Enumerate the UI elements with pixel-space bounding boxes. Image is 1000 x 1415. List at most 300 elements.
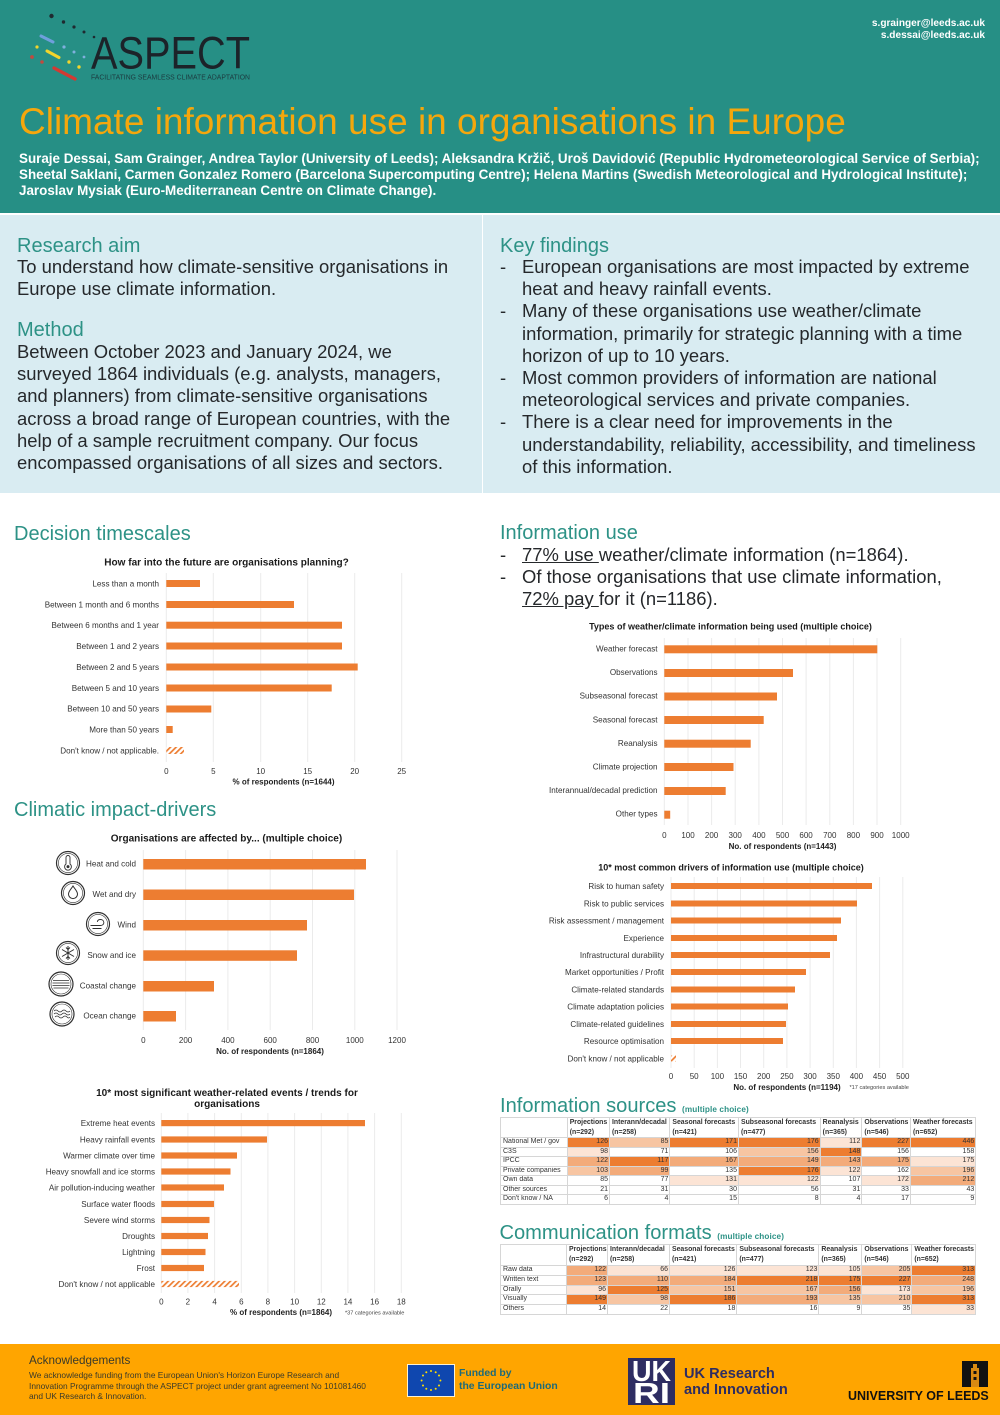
table: information sources: Own data [503, 1176, 533, 1183]
table: information sources: 33 [901, 1186, 909, 1193]
table: communication formats: Reanalysis [821, 1246, 857, 1253]
heading: information use: Information use [500, 522, 638, 544]
panel: research aim and method [0, 215, 482, 493]
category labels: Climate adaptation policies [567, 1002, 664, 1012]
axis: 350 [827, 1072, 841, 1081]
axis: 300 [803, 1072, 817, 1081]
category labels: Observations [610, 668, 658, 677]
text: information use list: - [500, 566, 506, 587]
axis: % of respondents (n=1864) [230, 1308, 332, 1317]
table: communication formats: Raw data [503, 1266, 533, 1273]
text: key findings list: information, primarily for strategic planning with a time [522, 323, 962, 344]
axis: 250 [780, 1072, 794, 1081]
table: information sources: 85 [661, 1138, 668, 1145]
table: information sources: (n=477) [741, 1128, 765, 1136]
acknowledgements text: Innovation Programme through the ASPECT project under grant agreement No 101081460 [29, 1381, 366, 1391]
text: information use list [500, 544, 942, 609]
table: information sources: 158 [963, 1148, 974, 1155]
table: information sources: 149 [807, 1157, 819, 1164]
table: information sources: 6 [604, 1195, 608, 1202]
axis: 1000 [892, 831, 910, 840]
category labels: Between 2 and 5 years [76, 663, 159, 672]
chart: climatic impact drivers [49, 834, 406, 1056]
axis: 200 [757, 1072, 771, 1081]
text: key findings list: Many of these organisations use weather/climate [522, 300, 921, 321]
table: information sources: 21 [600, 1186, 608, 1193]
chart: planning horizon [45, 558, 407, 786]
table: information sources: 156 [897, 1148, 909, 1155]
table: communication formats: 313 [962, 1295, 974, 1302]
category labels: Don't know / not applicable. [60, 746, 159, 755]
category labels: Don't know / not applicable [568, 1054, 664, 1064]
table: information sources: 77 [661, 1176, 668, 1183]
category labels: Weather forecast [596, 644, 658, 653]
category labels: Other types [616, 810, 658, 819]
table: information sources [500, 1117, 976, 1205]
category labels: Infrastructural durability [580, 951, 665, 960]
category labels: Lightning [122, 1248, 155, 1257]
axis: 600 [264, 1036, 277, 1045]
bars [671, 883, 872, 1062]
heading: key findings: Key findings [500, 235, 609, 257]
category labels: Between 6 months and 1 year [51, 621, 159, 630]
category labels: Don't know / not applicable [59, 1280, 155, 1289]
table: communication formats: 110 [657, 1276, 668, 1283]
category labels [549, 644, 658, 819]
table: information sources: 56 [811, 1186, 819, 1193]
table: information sources: 196 [963, 1167, 974, 1174]
table: communication formats: 135 [849, 1295, 860, 1302]
table: information sources: 156 [807, 1148, 819, 1155]
text: research aim [17, 256, 448, 299]
table: information sources: 4 [856, 1195, 860, 1202]
axis [141, 1036, 406, 1056]
table: information sources: 175 [897, 1157, 909, 1164]
table: information sources: 143 [849, 1157, 860, 1164]
axis: 10 [256, 767, 266, 776]
heading: communication formats: Communication formats (multiple choice) [500, 1222, 784, 1244]
table: information sources: 106 [725, 1148, 737, 1155]
logo: European Union flag [407, 1364, 455, 1397]
table: communication formats: (n=365) [821, 1256, 846, 1262]
table: information sources: 171 [725, 1138, 737, 1145]
table: communication formats: 123 [806, 1266, 817, 1273]
table: communication formats: Others [503, 1305, 524, 1312]
text: funded by the European Union [459, 1368, 558, 1392]
table: communication formats: 22 [660, 1305, 668, 1312]
table: information sources: 148 [849, 1148, 860, 1155]
category labels: Subseasonal forecast [580, 692, 658, 700]
category labels: Market opportunities / Profit [565, 968, 665, 977]
category labels [46, 1119, 156, 1289]
category labels: More than 50 years [89, 725, 159, 734]
table: communication formats: 151 [724, 1286, 735, 1293]
logo: ASPECT [30, 14, 250, 82]
table: information sources: (n=258) [612, 1128, 636, 1136]
table: communication formats: 313 [962, 1266, 974, 1273]
text: key findings list: European organisations are most impacted by extreme [522, 256, 969, 277]
table: communication formats: 167 [806, 1286, 817, 1293]
category labels: Experience [624, 934, 664, 943]
table: information sources: Observations [864, 1119, 908, 1126]
axis: 100 [681, 831, 695, 840]
category labels: Surface water floods [81, 1200, 155, 1209]
table: information sources: 99 [661, 1167, 668, 1174]
table: information sources: 212 [963, 1176, 974, 1183]
category labels: Droughts [122, 1232, 155, 1241]
axis: 18 [397, 1298, 406, 1306]
axis: 500 [896, 1072, 910, 1081]
table: communication formats: Weather forecasts [914, 1246, 974, 1253]
axis [669, 1072, 910, 1092]
axis: 0 [669, 1072, 674, 1081]
table: communication formats: Written text [503, 1276, 538, 1283]
category labels: Wet and dry [92, 890, 137, 899]
axis: 14 [343, 1298, 353, 1306]
text: method: across a broad range of European countries, with the [17, 408, 450, 429]
chart title: 10* most significant weather-related events / trends for [96, 1088, 358, 1099]
table: communication formats: (n=477) [739, 1256, 764, 1262]
chart title: Organisations are affected by... (multiple choice) [111, 834, 342, 844]
category labels: Risk to human safety [588, 882, 665, 891]
table: information sources: 107 [849, 1176, 860, 1183]
table: communication formats: 123 [594, 1276, 606, 1283]
chart title: Types of weather/climate information being used (multiple choice) [589, 621, 872, 631]
category labels: Air pollution-inducing weather [49, 1183, 155, 1192]
axis: 450 [873, 1072, 887, 1081]
table: communication formats: 205 [899, 1266, 910, 1273]
table: information sources: Interann/decadal [612, 1119, 667, 1126]
category labels: Warmer climate over time [63, 1151, 155, 1160]
category labels: Ocean change [83, 1012, 136, 1021]
contact emails: s.dessai@leeds.ac.uk [881, 30, 985, 40]
category labels: Coastal change [80, 982, 136, 990]
axis: 5 [211, 767, 216, 776]
axis: 0 [662, 831, 667, 840]
table: communication formats: 227 [899, 1276, 910, 1283]
table: communication formats: 98 [660, 1295, 668, 1302]
category labels: Heavy rainfall events [80, 1135, 155, 1144]
table: communication formats: Subseasonal forecasts [739, 1246, 814, 1253]
axis: 200 [705, 831, 719, 840]
axis: 400 [752, 831, 766, 840]
category labels: Between 5 and 10 years [72, 684, 159, 693]
contact emails: s.grainger@leeds.ac.uk [872, 18, 985, 28]
table: communication formats: 105 [849, 1266, 860, 1273]
axis: 20 [350, 767, 360, 776]
authors: Sheetal Saklani, Carmen Gonzalez Romero (Barcelona Supercomputing Centre); Helena Martins (Swedish Meteorological and Hydrological Institute); [19, 167, 967, 182]
table: information sources: 122 [596, 1157, 608, 1164]
axis [164, 767, 407, 786]
table: information sources: Seasonal forecasts [672, 1119, 735, 1126]
table: information sources: Private companies [503, 1167, 561, 1174]
axis: 500 [776, 831, 790, 840]
table: information sources: (n=652) [913, 1128, 937, 1136]
text: UK Research and Innovation: UK Research [684, 1366, 775, 1382]
axis: 15 [303, 767, 313, 776]
icon: snowflake [56, 942, 80, 964]
table: information sources: 176 [807, 1167, 819, 1174]
axis [662, 831, 910, 851]
table: information sources: Projections [570, 1119, 607, 1126]
table: information sources: 103 [596, 1167, 608, 1174]
axis: 700 [823, 831, 837, 840]
category labels: Extreme heat events [81, 1119, 155, 1128]
table: information sources: (n=292) [570, 1128, 594, 1136]
table: information sources: 30 [729, 1186, 737, 1193]
table: information sources: 31 [661, 1186, 668, 1193]
heading: climatic impact-drivers: Climatic impact-drivers [14, 799, 216, 821]
category labels: Interannual/decadal prediction [549, 786, 658, 795]
category labels: Climate-related guidelines [570, 1020, 664, 1029]
axis: No. of respondents (n=1864) [216, 1047, 324, 1056]
table: communication formats: Seasonal forecasts [672, 1246, 735, 1253]
acknowledgements text [29, 1370, 366, 1401]
heading: information sources: Information sources (multiple choice) [500, 1095, 749, 1117]
table: information sources: 8 [815, 1195, 819, 1202]
table: communication formats: 186 [724, 1295, 735, 1302]
axis: 0 [164, 767, 169, 776]
category labels [45, 579, 159, 755]
table: communication formats: 35 [903, 1305, 910, 1312]
text: key findings list: heat and heavy rainfall events. [522, 278, 772, 299]
axis: 900 [870, 831, 884, 840]
axis: 8 [266, 1298, 271, 1306]
table: communication formats: 173 [899, 1286, 910, 1293]
table: information sources: 446 [963, 1138, 974, 1145]
table: information sources: 126 [596, 1138, 608, 1145]
table: information sources: Reanalysis [823, 1119, 859, 1126]
table: communication formats: 196 [962, 1286, 974, 1293]
text: method: and planners) from climate-sensitive organisations [17, 385, 428, 406]
axis: 200 [179, 1036, 193, 1045]
logo: UKRI [628, 1358, 675, 1405]
table: communication formats: 156 [849, 1286, 860, 1293]
category labels [549, 882, 665, 1064]
panel: key findings [483, 215, 1000, 493]
chart: drivers of information use [549, 862, 910, 1092]
text: method: surveyed 1864 individuals (e.g. analysts, managers, [17, 363, 441, 384]
table: communication formats: 210 [899, 1295, 910, 1302]
table: information sources: 4 [664, 1195, 668, 1202]
table: communication formats: Orally [503, 1286, 521, 1293]
table: information sources: 43 [966, 1186, 974, 1193]
icon: thermometer [56, 852, 80, 874]
axis [159, 1298, 406, 1317]
text: key findings list: - [500, 411, 506, 432]
category labels: Between 1 and 2 years [76, 642, 159, 651]
axis: 25 [397, 767, 407, 776]
table: communication formats: 96 [598, 1286, 606, 1293]
text: key findings list: Most common providers of information are national [522, 367, 937, 388]
table: information sources: 112 [849, 1138, 860, 1145]
chart title [96, 1088, 358, 1110]
table: information sources: 17 [901, 1195, 909, 1202]
table: information sources: 122 [807, 1176, 819, 1183]
axis: 6 [239, 1298, 244, 1306]
bars [143, 859, 366, 1022]
logo: University of Leeds crest [962, 1361, 988, 1387]
acknowledgements text: We acknowledge funding from the European Union's Horizon Europe Research and [29, 1370, 339, 1380]
table: communication formats: 149 [594, 1295, 606, 1302]
table: information sources: 122 [849, 1167, 860, 1174]
table: information sources: 85 [600, 1176, 608, 1183]
table: information sources: (n=365) [823, 1128, 847, 1136]
table: communication formats: 184 [724, 1276, 735, 1283]
text: method: help of a sample recruitment company. Our focus [17, 430, 418, 451]
text: University of Leeds: UNIVERSITY OF LEEDS [848, 1389, 989, 1403]
header banner [0, 0, 1000, 213]
category labels: Snow and ice [87, 951, 136, 960]
heading: method: Method [17, 319, 84, 341]
category labels: Less than a month [92, 579, 159, 588]
text: key findings list: horizon of up to 10 years. [522, 345, 730, 366]
axis: 400 [850, 1072, 864, 1081]
axis: 2 [186, 1298, 191, 1306]
table: information sources: 117 [657, 1157, 668, 1164]
text: UK Research and Innovation [684, 1366, 788, 1398]
text: key findings list [500, 256, 976, 477]
acknowledgements text: and UK Research & Innovation. [29, 1391, 146, 1401]
category labels: Wind [118, 921, 136, 930]
category labels: Climate projection [593, 762, 658, 772]
table: information sources: (n=421) [672, 1128, 697, 1136]
bars [161, 1120, 365, 1287]
axis: 300 [729, 831, 742, 840]
category labels: Climate-related standards [571, 986, 664, 994]
category labels: Reanalysis [618, 739, 658, 748]
text: key findings list: understandability, reliability, accessibility, and timeliness [522, 434, 976, 455]
icon: wind [86, 912, 110, 936]
acknowledgements heading: Acknowledgements [29, 1354, 130, 1367]
bars [664, 645, 877, 819]
logo: ASPECT: FACILITATING SEAMLESS CLIMATE ADAPTATION [91, 74, 250, 82]
table: communication formats: (n=258) [610, 1256, 634, 1262]
axis: 4 [212, 1298, 217, 1306]
text: key findings list: There is a clear need for improvements in the [522, 411, 893, 432]
text: funded by the European Union: the European Union [459, 1380, 558, 1392]
category labels: Risk assessment / management [549, 916, 665, 926]
axis: 0 [141, 1036, 146, 1045]
axis: 12 [317, 1298, 326, 1306]
contact emails [872, 18, 985, 40]
axis: 600 [799, 831, 813, 840]
text: method: encompassed organisations of all sizes and sectors. [17, 452, 443, 473]
axis: 0 [159, 1298, 164, 1306]
table: information sources: 98 [600, 1148, 608, 1155]
table: communication formats: 16 [810, 1305, 817, 1312]
axis: *17 categories available [850, 1085, 909, 1091]
table: information sources: Don't know / NA [503, 1195, 553, 1202]
table: communication formats [500, 1244, 976, 1315]
table: communication formats: (n=421) [672, 1256, 696, 1262]
logo: ASPECT: ASPECT [91, 28, 250, 79]
axis: 150 [734, 1072, 748, 1081]
text: information use list: 72% pay for it (n=1186). [522, 588, 718, 609]
chart title: 10* most common drivers of information use (multiple choice) [598, 862, 864, 872]
table: communication formats: 33 [966, 1305, 974, 1312]
axis: No. of respondents (n=1443) [729, 842, 837, 851]
table: information sources: 172 [897, 1176, 909, 1183]
category labels: Risk to public services [584, 900, 664, 908]
table: communication formats: Projections [569, 1246, 607, 1253]
axis: 800 [306, 1036, 320, 1045]
table: communication formats: 125 [656, 1286, 668, 1293]
table: information sources: Subseasonal forecasts [741, 1119, 816, 1126]
axis: 16 [370, 1298, 380, 1306]
title: Climate information use in organisations in Europe [19, 101, 846, 142]
table: information sources: 135 [725, 1167, 737, 1174]
table: information sources: IPCC [503, 1157, 520, 1164]
table: communication formats: 14 [598, 1305, 606, 1312]
text: key findings list: meteorological services and private companies. [522, 389, 910, 410]
table: information sources: National Met / gov [503, 1138, 559, 1145]
text: method [17, 341, 450, 473]
table: information sources: 71 [661, 1148, 668, 1155]
text: information use list: 77% use weather/climate information (n=1864). [522, 544, 909, 565]
axis: 50 [690, 1072, 699, 1081]
text: information use list: - [500, 544, 506, 565]
category labels: Resource optimisation [584, 1037, 664, 1046]
text: key findings list: of this information. [522, 456, 673, 477]
category labels: Seasonal forecast [593, 715, 658, 724]
footer banner [0, 1344, 1000, 1415]
table: information sources: 175 [963, 1157, 974, 1164]
table: information sources: 9 [970, 1195, 974, 1202]
chart: types of information [549, 621, 910, 851]
table: information sources: 176 [807, 1138, 819, 1145]
table: communication formats: (n=546) [864, 1256, 889, 1262]
table: information sources: 167 [725, 1157, 737, 1164]
table: communication formats: 66 [660, 1266, 668, 1273]
axis: 400 [221, 1036, 235, 1045]
category labels: Severe wind storms [84, 1216, 155, 1225]
table: communication formats: Visually [503, 1295, 527, 1302]
authors: Suraje Dessai, Sam Grainger, Andrea Taylor (University of Leeds); Aleksandra Kržič, Uroš Davidović (Republic Hydrometeorological Service of Serbia); [19, 151, 980, 166]
heading: research aim: Research aim [17, 235, 140, 257]
text: key findings list: - [500, 256, 506, 277]
heading: decision timescales: Decision timescales [14, 522, 191, 544]
axis: % of respondents (n=1644) [232, 778, 335, 786]
table: information sources: C3S [503, 1148, 517, 1155]
table: information sources: 31 [853, 1186, 860, 1193]
category labels: Between 10 and 50 years [67, 704, 159, 714]
chart title: organisations [194, 1099, 260, 1110]
category labels [80, 860, 137, 1021]
table: communication formats: 122 [594, 1266, 606, 1273]
text: UK Research and Innovation: and Innovation [684, 1382, 788, 1398]
table: communication formats: 175 [849, 1276, 860, 1283]
category labels: Between 1 month and 6 months [45, 600, 159, 609]
category labels: Frost [137, 1264, 156, 1273]
axis: No. of respondents (n=1194) [733, 1083, 841, 1092]
axis: 1000 [346, 1036, 364, 1045]
icon: coastal change [49, 972, 73, 996]
category labels: Heavy snowfall and ice storms [46, 1167, 155, 1176]
table: communication formats: 248 [962, 1276, 974, 1283]
text: key findings list: - [500, 367, 506, 388]
table: communication formats: (n=652) [914, 1256, 939, 1262]
table: information sources: 162 [897, 1167, 909, 1174]
table: information sources: 15 [729, 1195, 737, 1202]
axis: 100 [711, 1072, 725, 1081]
text: research aim: To understand how climate-sensitive organisations in [17, 256, 448, 277]
icon: ocean change [50, 1002, 74, 1026]
authors: Jaroslav Mysiak (Euro-Mediterranean Centre on Climate Change). [19, 183, 436, 198]
table: communication formats: 126 [724, 1266, 735, 1273]
axis: 800 [847, 831, 861, 840]
table: information sources: 131 [725, 1176, 737, 1183]
